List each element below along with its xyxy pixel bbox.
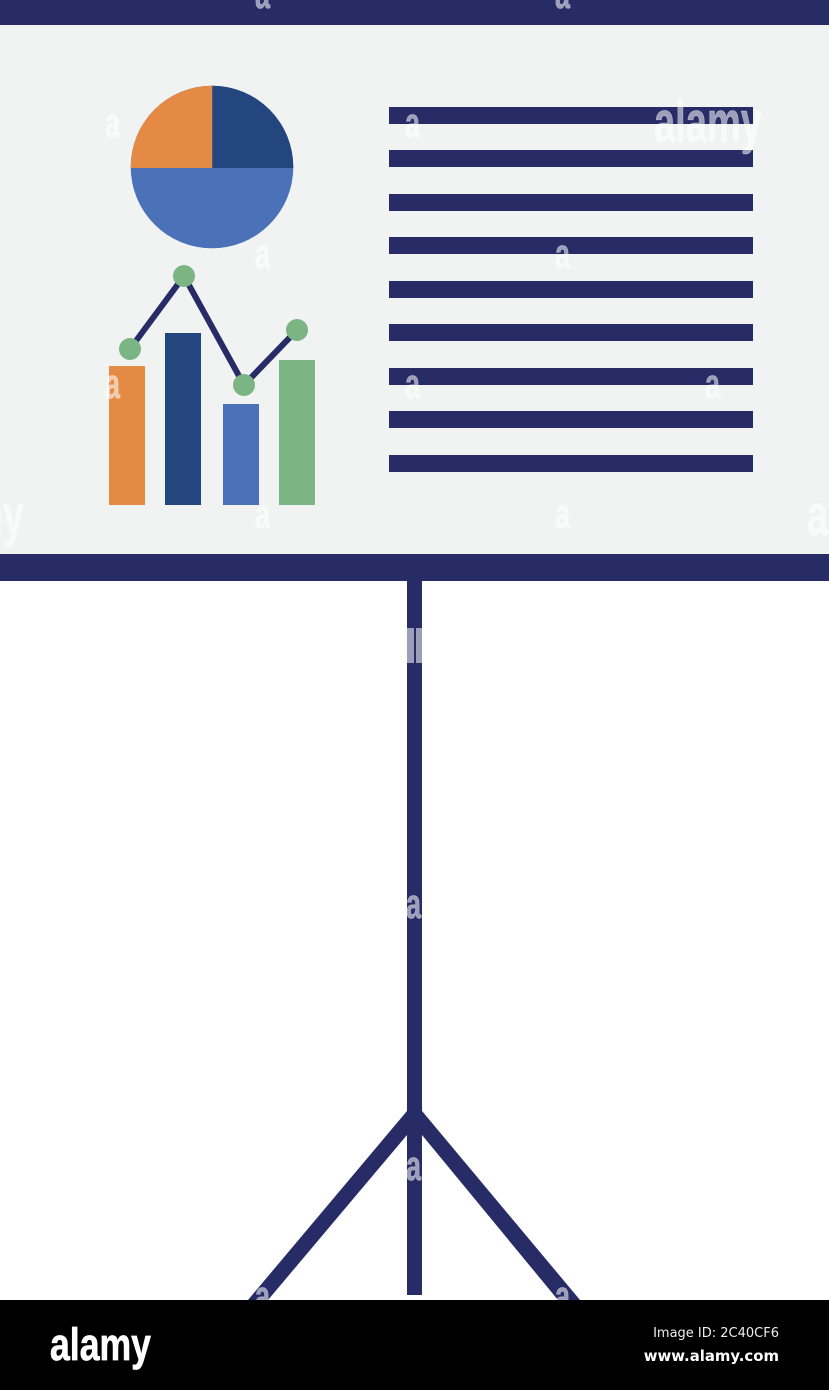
footer url: www.alamy.com	[644, 1347, 779, 1365]
image id: Image ID: 2C40CF6	[653, 1326, 779, 1341]
bottom bar	[0, 554, 829, 581]
watermark: alamy	[654, 90, 762, 155]
top bar	[0, 0, 829, 25]
watermark: a	[406, 1142, 421, 1189]
watermark: a	[705, 360, 720, 407]
watermark: a	[555, 230, 570, 277]
stock footer bar	[0, 1300, 829, 1390]
watermark: a	[405, 99, 420, 146]
watermark: a	[406, 880, 421, 927]
line chart	[119, 265, 308, 396]
watermark: a	[405, 360, 420, 407]
bar chart	[109, 333, 315, 505]
watermark: a	[555, 490, 570, 537]
tripod stand	[248, 581, 580, 1300]
watermark: a	[105, 99, 120, 146]
text lines block	[389, 107, 753, 472]
watermark: a	[555, 1272, 570, 1319]
watermark: a	[255, 490, 270, 537]
watermark: a	[105, 360, 120, 407]
watermark: a	[255, 1272, 270, 1319]
watermark: a	[255, 230, 270, 277]
pie chart	[131, 86, 293, 248]
board panel	[0, 25, 829, 555]
footer logo: alamy	[50, 1319, 151, 1370]
